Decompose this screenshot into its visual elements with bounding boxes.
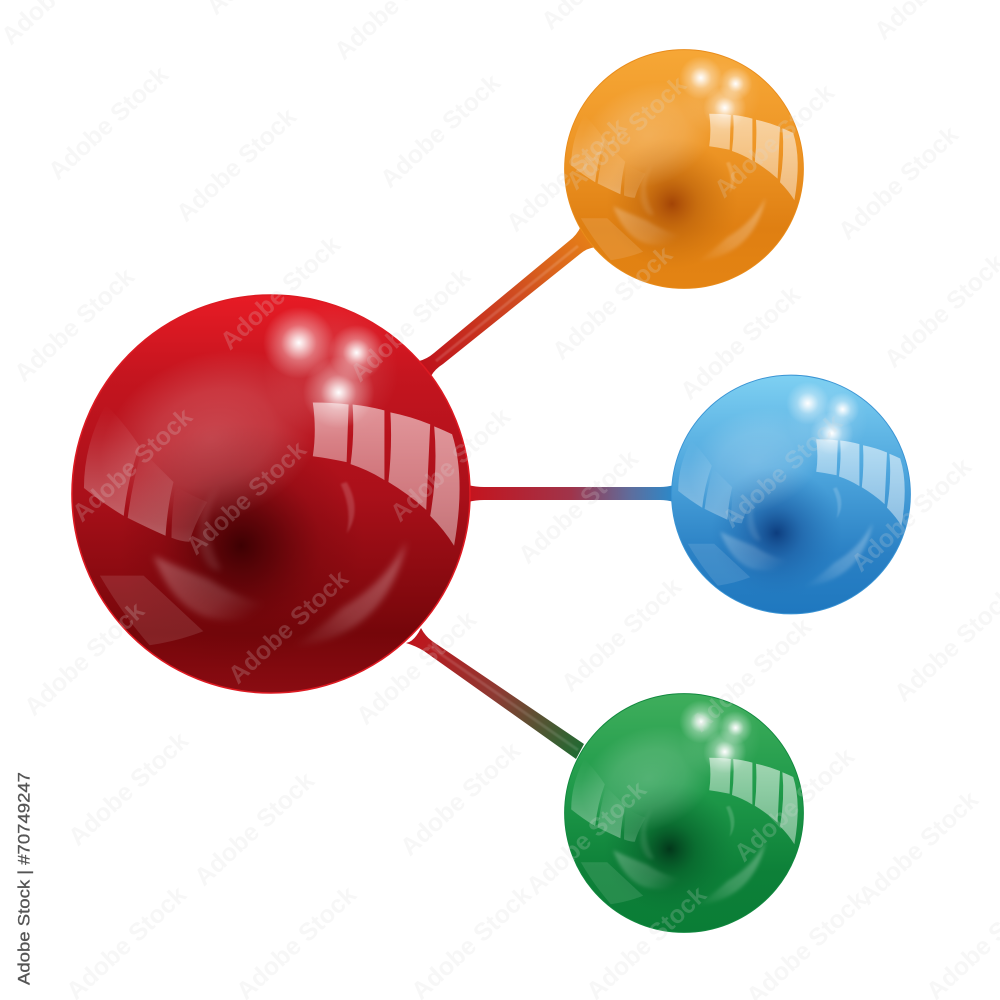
watermark pattern: Adobe Stock (686, 613, 817, 737)
connector: red to blue (468, 485, 674, 502)
watermark pattern: Adobe Stock (833, 121, 964, 245)
watermark pattern: Adobe Stock (513, 445, 644, 569)
stock id caption: Adobe Stock | #70749247 (14, 772, 34, 985)
sphere: large red (72, 295, 470, 693)
watermark pattern: Adobe Stock (853, 786, 984, 910)
watermark pattern: Adobe Stock (375, 69, 506, 193)
watermark pattern: Adobe Stock (395, 737, 526, 861)
watermark pattern: Adobe Stock (181, 436, 312, 560)
watermark pattern: Adobe Stock (846, 453, 977, 577)
sphere: green (565, 694, 803, 932)
sphere: orange (565, 50, 803, 288)
watermark pattern: Adobe Stock (709, 79, 840, 203)
watermark pattern: Adobe Stock (345, 263, 476, 387)
watermark pattern: Adobe Stock (9, 263, 140, 387)
watermark pattern: Adobe Stock (351, 606, 482, 730)
watermark pattern: Adobe Stock (171, 103, 302, 227)
watermark pattern: Adobe Stock (521, 776, 652, 900)
watermark pattern: Adobe Stock (189, 767, 320, 891)
watermark pattern: Adobe Stock (561, 71, 692, 195)
sphere: blue (672, 375, 910, 614)
connector: red to green (406, 628, 584, 759)
watermark pattern: Adobe Stock (675, 281, 806, 405)
watermark pattern: Adobe Stock (501, 113, 632, 237)
watermark pattern: Adobe Stock (729, 743, 860, 867)
watermark pattern: Adobe Stock (67, 403, 198, 527)
watermark pattern: Adobe Stock (223, 565, 354, 689)
watermark pattern: Adobe Stock (19, 597, 150, 721)
watermark pattern: Adobe Stock (556, 573, 687, 697)
watermark pattern: Adobe Stock (385, 403, 516, 527)
watermark pattern: Adobe Stock (63, 727, 194, 851)
watermark pattern: Adobe Stock (717, 409, 848, 533)
connector: red to orange (419, 226, 596, 376)
watermark pattern: Adobe Stock (547, 241, 678, 365)
watermark pattern: Adobe Stock (215, 231, 346, 355)
watermark pattern: Adobe Stock (43, 61, 174, 185)
